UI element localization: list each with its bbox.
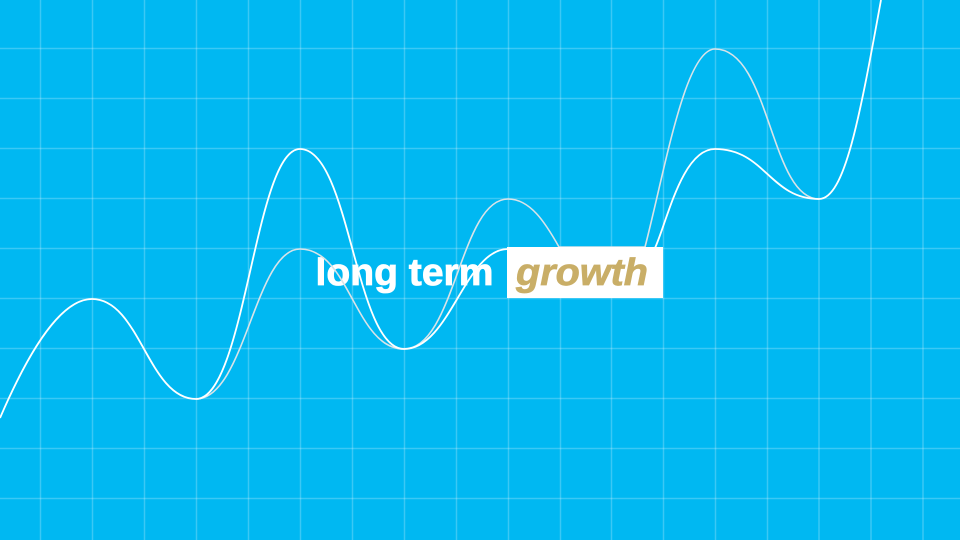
line: primary growth curve	[0, 0, 881, 418]
highlight box: growth: growth	[515, 252, 648, 294]
highlight box: growth	[507, 247, 663, 298]
line: secondary growth curve	[196, 49, 819, 399]
heading text: long term: long term	[316, 252, 494, 294]
